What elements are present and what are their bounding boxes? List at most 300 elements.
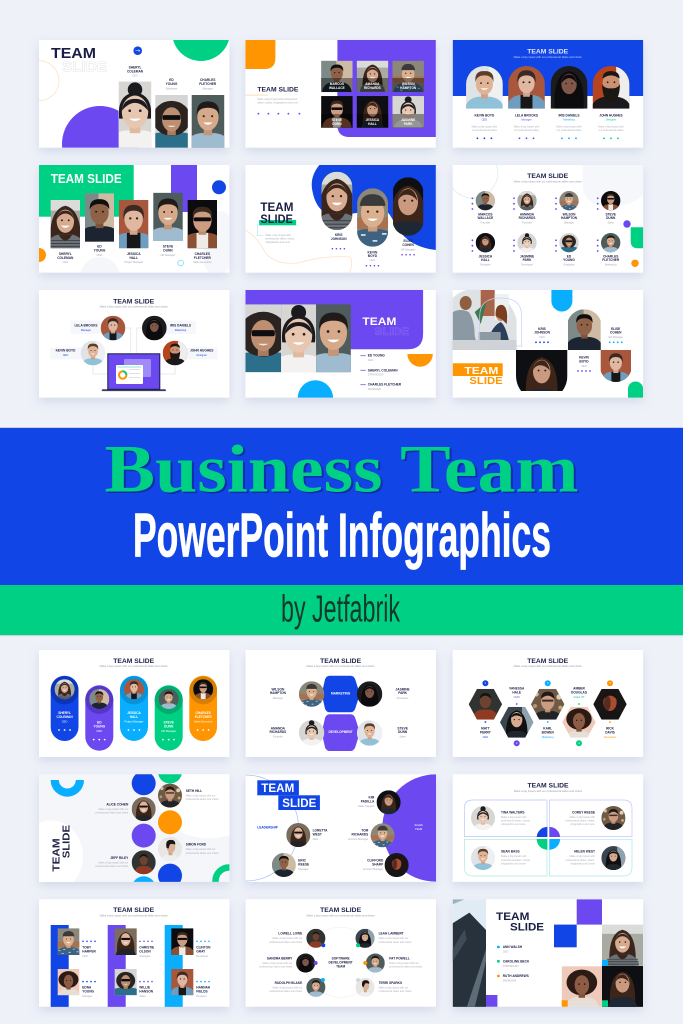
heading: TEAM <box>260 200 293 214</box>
rotated title: SLIDE <box>61 825 72 858</box>
heading and description: slides, charts, infographics and more <box>257 102 299 104</box>
pill: Steve Dunn <box>155 685 183 751</box>
list: Caroline Beck: STRATEGIST <box>503 964 519 968</box>
person: Kevin Boyd: our professional slides <box>472 129 498 132</box>
person: Eric Reese <box>272 853 309 877</box>
heading: Make a big impact with our professional slides and charts <box>307 664 375 668</box>
heading: Make a big impact with our professional slides and charts <box>100 304 168 308</box>
slide: collage with arches and half circles <box>453 289 643 401</box>
person: Hannah Fields: FIELDS <box>196 990 208 994</box>
person tile: Marcos Wallace: WALLACE <box>329 86 345 90</box>
person: Seth Hill: SETH HILL <box>186 789 202 793</box>
pill: Jessica Hall: HALL <box>130 715 138 719</box>
orange title block: TEAM <box>464 365 499 377</box>
heading: TEAM SLIDE <box>113 298 155 305</box>
person tile: Wilson Hampton: WILSON <box>402 82 415 86</box>
person: Amanda Richards: Founder <box>522 220 532 224</box>
purple corner square <box>486 995 497 1007</box>
person: Iris Daniels: our professional slides <box>557 129 582 132</box>
rotated title <box>51 825 72 872</box>
portrait: John Hughes <box>163 341 187 365</box>
person 1: Matt Perry: CEO <box>483 735 488 739</box>
person 4: Amber Douglas: DOUGLAS <box>571 691 587 695</box>
heading tiles: SLIDE <box>282 798 317 810</box>
person: Amanda Richards: RICHARDS <box>269 730 286 734</box>
list: Sheryl Coleman: SHERYL COLEMAN <box>368 368 398 372</box>
cyan half circle <box>298 380 333 416</box>
person: Amanda Richards: RICHARDS <box>519 216 535 220</box>
person: Sandra Berry: professional slides and charts <box>259 965 293 968</box>
pale right panel <box>204 211 230 273</box>
title <box>496 911 544 934</box>
person 3: Karl Bowen: 3 <box>547 681 549 685</box>
white corner shape <box>19 820 83 892</box>
list: Caroline Beck <box>497 959 530 968</box>
person: Jeff Riley: JEFF RILEY <box>110 856 129 860</box>
person: Simon Ford: professional slides and charts <box>186 852 219 855</box>
label box: Iris Daniels <box>165 321 196 334</box>
heading: TEAM SLIDE <box>320 658 362 665</box>
person tile: Jasmine Park: PARK <box>404 122 413 126</box>
label box: Iris Daniels: Marketing <box>175 328 187 332</box>
person tile: Wilson Hampton <box>392 61 424 92</box>
label: Kris Johnson: JOHNSON <box>534 331 551 335</box>
person: Sheryl Coleman: COLEMAN <box>127 69 144 73</box>
person tile: Marcos Wallace: MARCOS <box>330 82 344 86</box>
person: Sheryl Coleman <box>118 66 152 148</box>
person tile: Steve Dunn: DUNN <box>332 122 342 126</box>
person: Jessica Hall: Project Manager <box>124 260 143 264</box>
pale center ring <box>306 927 376 997</box>
person: Sean Bass: infographics and more <box>501 862 526 865</box>
person: Ed Young: ED <box>97 245 102 249</box>
person: Sheryl Coleman: COLEMAN <box>57 256 74 260</box>
person: Edna Young <box>55 969 96 998</box>
person: Wilson Hampton: WILSON <box>272 687 285 691</box>
slide: five colored pills <box>39 650 229 757</box>
list: Ann Walsh <box>497 945 523 954</box>
list: Ruth Andrews <box>497 974 529 982</box>
person: Clifford Sharp: CLIFFORD <box>367 858 384 862</box>
blue column <box>51 925 69 1007</box>
person 5: Rick Davis <box>593 680 627 739</box>
label: Elise Cohen: HR Manager <box>608 335 623 339</box>
person: Edna Young: Manager <box>82 994 93 998</box>
person: Wilson Hampton: WILSON <box>563 212 576 216</box>
person tile: Jessica Hall: HALL <box>368 122 377 126</box>
outline quadrant purple <box>549 800 632 837</box>
person: Kim Padilla: Sales Support <box>358 804 375 808</box>
person: Charles Fletcher <box>178 200 226 264</box>
label box: John Hughes: Designer <box>197 353 207 357</box>
center quartered circle <box>537 827 560 850</box>
person: John Hughes: JOHN HUGHES <box>599 114 623 118</box>
heading tiles: TEAM <box>261 783 294 795</box>
office photo arch <box>452 290 517 350</box>
person: Sandra Berry <box>259 954 318 972</box>
heading: Make a big impact with our professional slides and charts <box>514 55 582 59</box>
label: Elise Cohen: ELISE <box>611 327 620 331</box>
person 4: Amber Douglas: Sales VP <box>574 695 585 699</box>
person: Loretta West: CEO <box>313 837 318 841</box>
pill: Charles Fletcher: Sales Executive <box>194 720 213 724</box>
label box: Lela Brooks: Manager <box>81 328 91 332</box>
pale grey blob <box>583 165 644 207</box>
person: Charles Fletcher: Sales Executive <box>193 260 212 264</box>
person: Seth Hill: Make a big impact with our <box>186 794 216 797</box>
person: Helen West: HELEN WEST <box>574 850 595 854</box>
person: Marcos Wallace: MARCOS <box>478 212 492 216</box>
person: Kris Johnson <box>308 172 366 250</box>
person: Jeff Riley: professional slides and charts <box>95 865 129 868</box>
pill: Ed Young: ED <box>97 721 102 725</box>
person: Jasmine Park: Developer <box>397 696 409 700</box>
green corner shape <box>628 381 643 398</box>
slide: software development team circle <box>246 899 436 1007</box>
label box: Lela Brooks <box>71 321 102 334</box>
list: Caroline Beck: CAROLINE BECK <box>503 959 530 963</box>
title: TEAM <box>496 911 529 923</box>
heading: TEAM SLIDE <box>113 907 155 914</box>
person: Kim Padilla: PADILLA <box>361 800 375 804</box>
person: Elise Cohen: HR Manager <box>401 248 416 252</box>
heading <box>307 907 375 918</box>
person: Iris Daniels: IRIS DANIELS <box>558 114 580 118</box>
person: Loretta West <box>286 823 328 847</box>
portrait: half circle woman <box>516 350 568 391</box>
person: Elise Cohen: COHEN <box>402 243 415 247</box>
pill: Steve Dunn: DUNN <box>164 725 174 729</box>
person: Christie Olson: Strategist <box>139 954 151 958</box>
heading <box>362 316 409 338</box>
banner: blue title band <box>0 427 683 585</box>
person: Jessica Hall: Designer <box>480 262 491 266</box>
person: Edna Young: YOUNG <box>82 990 95 994</box>
person: Kevin Boyd: Make a big impact with <box>472 126 498 128</box>
person: Jasmine Park: PARK <box>398 691 408 695</box>
person: Loretta West: WEST <box>313 832 322 836</box>
person: Elise Cohen: ELISE <box>403 239 413 243</box>
cyan bracket <box>257 224 263 236</box>
portrait: Charles Fletcher <box>316 304 351 372</box>
person: Kim Padilla <box>358 790 401 814</box>
list: Charles Fletcher <box>360 383 402 391</box>
purple column <box>108 925 126 1007</box>
person: Lowell Lowe: professional slides and charts <box>269 941 303 944</box>
blue square <box>554 925 577 947</box>
person: John Hughes: our professional slides <box>599 129 624 132</box>
heading: SLIDE <box>375 326 409 338</box>
person: Steve Dunn <box>153 192 183 256</box>
person: Seth Hill: professional slides and charts <box>186 798 219 801</box>
person 3: Karl Bowen: KARL <box>543 727 552 731</box>
person: Sandra Berry: Make a big impact with our <box>263 962 292 965</box>
heading: TEAM SLIDE <box>527 658 569 665</box>
laptop illustration <box>102 354 166 391</box>
blue header band <box>453 40 644 96</box>
person: Alice Cohen: ALICE COHEN <box>106 803 129 807</box>
description: infographics and more <box>265 241 291 244</box>
person 4: Amber Douglas: 4 <box>578 741 580 745</box>
person: Leah Lambert: Make a big impact with our <box>379 937 409 940</box>
heading <box>100 658 168 668</box>
purple development hexagon <box>322 714 359 751</box>
person: Marcos Wallace: Founder <box>481 220 490 224</box>
heading: TEAM SLIDE <box>528 782 569 789</box>
person: Kevin Boyd: CEO <box>482 118 487 122</box>
person: Wilson Hampton: Manager <box>273 696 283 700</box>
person: Terri Sparks: TERRI SPARKS <box>379 981 402 985</box>
person 3: Karl Bowen <box>531 680 564 739</box>
heading: TEAM SLIDE <box>527 49 569 56</box>
person: Willie Hanson: HANSON <box>139 990 154 994</box>
person: Ed Young: CMO <box>96 253 103 257</box>
person: Pat Powell <box>363 954 423 972</box>
slide: leadership and sales team <box>193 774 490 882</box>
list: Ruth Andrews: RUTH ANDREWS <box>503 974 529 978</box>
list: Ed Young <box>360 354 385 362</box>
person: Hannah Fields: HANNAH <box>196 986 211 990</box>
orange corner shape <box>245 40 275 69</box>
person: Sean Bass: Make a big impact with <box>501 855 527 858</box>
blue blob <box>312 165 436 250</box>
heading: Make a big impact with our professional slides and charts <box>514 180 582 184</box>
label: Kevin Boyd: BOYD <box>579 360 589 364</box>
person: Marcos Wallace: WALLACE <box>478 216 493 220</box>
label box: Kevin Boyd: KEVIN BOYD <box>56 349 76 353</box>
author text: by Jetfabrik <box>281 589 401 631</box>
person: Iris Daniels <box>550 66 588 140</box>
building photo <box>453 899 486 1007</box>
heading: TEAM SLIDE <box>527 173 569 180</box>
person tile: Amanda Richards: AMANDA <box>365 82 380 86</box>
green header block <box>39 165 134 217</box>
slide: staggered circles <box>19 760 259 900</box>
person 1: Matt Perry: PERRY <box>480 730 492 734</box>
heading <box>307 658 375 668</box>
person: Jasmine Park <box>513 233 537 266</box>
person: Clinton Gray <box>169 928 211 958</box>
person: Steve Dunn: DUNN <box>163 248 173 252</box>
heading <box>259 200 296 226</box>
person: Ed Young: YOUNG <box>94 248 106 252</box>
label box: Iris Daniels: IRIS DANIELS <box>170 323 191 327</box>
purple semicircle <box>62 106 138 148</box>
person: Corey Reese <box>566 806 625 830</box>
heading: TEAM <box>362 316 396 328</box>
person: Rudolph Blake: RUDOLPH BLAKE <box>275 981 302 985</box>
person: Charles Fletcher <box>192 78 224 148</box>
heading tiles <box>257 780 320 810</box>
person: Tom Richards <box>348 823 395 847</box>
person: Helen West <box>566 846 625 870</box>
person: Iris Daniels: Make a big impact with <box>556 126 582 128</box>
peach outline circle <box>39 60 60 102</box>
person: Jessica Hall: JESSICA <box>127 252 141 256</box>
connector lines <box>93 328 175 374</box>
person tile: Jessica Hall: JESSICA <box>366 118 380 122</box>
heading: Make a big impact with our professional slides and charts <box>100 913 168 917</box>
portrait: bottom center <box>562 966 602 1007</box>
person: Charles Fletcher: CHARLES <box>200 78 215 82</box>
list: Ann Walsh: CEO <box>503 949 508 953</box>
person: Wilson Hampton <box>555 191 579 224</box>
cyan small square <box>602 960 608 966</box>
person: Tina Walters: infographics and more <box>501 823 526 826</box>
person: Toby Harper: TOBY <box>82 945 92 949</box>
person: Willie Hanson <box>113 969 154 998</box>
label: Elise Cohen <box>608 327 623 343</box>
person 5: Rick Davis: DAVIS <box>605 730 615 734</box>
person: Jessica Hall: HALL <box>129 256 138 260</box>
person 2: Vanessa Hale: 2 <box>516 741 518 745</box>
person: Corey Reese: professional slides, charts, <box>566 819 595 822</box>
purple half circle <box>382 774 490 882</box>
person 4: Amber Douglas: AMBER <box>573 687 586 691</box>
person: Lela Brooks: LELA BROOKS <box>515 114 538 118</box>
person: Jessica Hall <box>472 233 495 266</box>
person: Hannah Fields: Designer <box>196 994 207 998</box>
person: Kevin Boyd: KEVIN BOYD <box>474 114 495 118</box>
slide: green header with five portraits <box>36 165 232 279</box>
list: Ann Walsh: ANN WALSH <box>503 945 523 949</box>
person: Jessica Hall <box>119 200 148 264</box>
portrait: Lela Brooks <box>101 316 125 340</box>
person: Wilson Hampton: HAMPTON <box>270 691 287 695</box>
label box: John Hughes: JOHN HUGHES <box>190 349 213 353</box>
person: Alice Cohen: Make a big impact with our <box>99 808 128 811</box>
label: Kris Johnson: CEO <box>539 335 545 339</box>
cyan column <box>165 925 183 1007</box>
blue circle <box>212 180 226 194</box>
person: Sean Bass: professional slides, charts, <box>501 859 531 862</box>
person: Tom Richards: RICHARDS <box>351 832 368 836</box>
person: Wilson Hampton: HAMPTON <box>561 216 578 220</box>
person: Leah Lambert: LEAH LAMBERT <box>379 932 404 936</box>
heading: TEAM SLIDE <box>113 658 155 665</box>
person: Sheryl Coleman: SHERYL <box>59 252 72 256</box>
portrait: Iris Daniels <box>142 316 167 340</box>
outline quadrant green <box>464 839 547 876</box>
heading and description: Make a big impact with professional <box>257 98 297 101</box>
person: Leah Lambert <box>356 929 412 948</box>
person: Terri Sparks <box>356 978 412 997</box>
title: Business Team: Business Team <box>106 432 580 508</box>
person: Amanda Richards: AMANDA <box>520 212 535 216</box>
person: Simon Ford: Make a big impact with our <box>186 848 216 851</box>
slide: eight circular portraits <box>448 148 644 273</box>
person: Steve Dunn: STEVE <box>397 726 408 730</box>
person: Sheryl Coleman: CEO <box>132 74 138 78</box>
person: Steve Dunn: STEVE <box>605 212 616 216</box>
heading: Make a big impact with our professional slides and charts <box>514 664 582 668</box>
green ring <box>216 868 242 894</box>
heading <box>100 907 168 918</box>
person: Rudolph Blake <box>269 978 325 997</box>
description: Make a big impact with <box>265 234 291 237</box>
person: Eric Reese: ERIC <box>298 859 307 863</box>
cyan ring <box>178 260 184 266</box>
person: Steve Dunn <box>357 720 408 746</box>
person tile: Jessica Hall <box>357 96 388 128</box>
heading: Make a big impact with our professional slides and charts <box>514 789 583 793</box>
person: Alice Cohen: professional slides and charts <box>95 811 129 814</box>
person: Jeff Riley: Make a big impact with our <box>99 861 128 864</box>
list: Charles Fletcher: MANAGER <box>368 387 381 391</box>
pill: Sheryl Coleman: CEO <box>62 720 67 724</box>
slide: hexagon portraits <box>453 650 643 757</box>
banner: green author band <box>0 585 683 636</box>
person 2: Vanessa Hale: HALE <box>512 691 521 695</box>
list: Ed Young: CEO <box>368 358 373 362</box>
person: Kevin Boyd <box>466 66 503 140</box>
slide: marketing and development teams <box>246 650 436 757</box>
orange half circle <box>407 354 433 367</box>
person: Jessica Hall: JESSICA <box>479 254 493 258</box>
person: Helen West: infographics and more <box>570 862 596 865</box>
portrait: Kevin Boyd <box>81 341 105 365</box>
slide: four outlined quadrants <box>453 774 643 882</box>
person: Charles Fletcher: Marketing <box>605 262 617 266</box>
person: Sheryl Coleman: CEO <box>62 260 68 264</box>
heading: Make a big impact with our professional slides and charts <box>100 664 168 668</box>
person: Steve Dunn <box>597 191 620 224</box>
person 2: Vanessa Hale: VANESSA <box>509 687 525 691</box>
person: Leah Lambert: professional slides and charts <box>379 941 412 944</box>
label: Elise Cohen: COHEN <box>610 331 622 335</box>
person: Tom Richards: Account Manager <box>348 837 368 841</box>
purple square <box>577 899 602 925</box>
slide: building photo and portrait grid <box>453 899 643 1007</box>
person: Charles Fletcher: FLETCHER <box>602 258 620 262</box>
person: Corey Reese: infographics and more <box>570 823 596 826</box>
person tile: Amanda Richards <box>357 61 388 92</box>
person 4: Amber Douglas <box>562 687 596 746</box>
person: Willie Hanson: WILLIE <box>139 986 150 990</box>
orange title block: SLIDE <box>469 375 503 387</box>
person: Steve Dunn: DUNN <box>398 730 408 734</box>
pill: Jessica Hall <box>120 676 148 741</box>
person: Toby Harper: HARPER <box>82 949 96 953</box>
person: Tina Walters: Make a big impact with <box>501 816 527 819</box>
label box: Kevin Boyd: CEO <box>63 353 68 357</box>
person 5: Rick Davis: RICK <box>606 727 615 731</box>
pill: Sheryl Coleman: COLEMAN <box>57 715 73 719</box>
person: Seth Hill <box>158 784 219 808</box>
title <box>51 48 106 72</box>
heading and description <box>245 86 299 104</box>
center label <box>328 956 353 968</box>
person: John Hughes: Designer <box>606 118 616 122</box>
slide: Team Slide with three tall portraits <box>36 40 232 154</box>
label box: Kevin Boyd <box>50 348 82 359</box>
person: Ed Young: YOUNG <box>166 82 178 86</box>
heading: TEAM SLIDE <box>51 172 122 186</box>
person: Steve Dunn: STEVE <box>163 245 173 249</box>
person: Pat Powell: PAT POWELL <box>389 956 410 960</box>
list: Ed Young: ED YOUNG <box>368 354 385 358</box>
sales team label: SALES <box>414 823 423 827</box>
leadership label: LEADERSHIP <box>257 826 279 830</box>
sales team label: TEAM <box>415 827 422 831</box>
person: Kevin Boyd <box>343 188 402 266</box>
person: Wilson Hampton: Manager <box>564 220 574 224</box>
outline quadrant cyan <box>549 839 632 876</box>
center label: DEVELOPMENT <box>328 960 353 964</box>
person: Clinton Gray: Developer <box>196 954 208 958</box>
person: Ed Young: ED <box>169 78 174 82</box>
person: Eric Reese: Manager <box>298 867 309 871</box>
